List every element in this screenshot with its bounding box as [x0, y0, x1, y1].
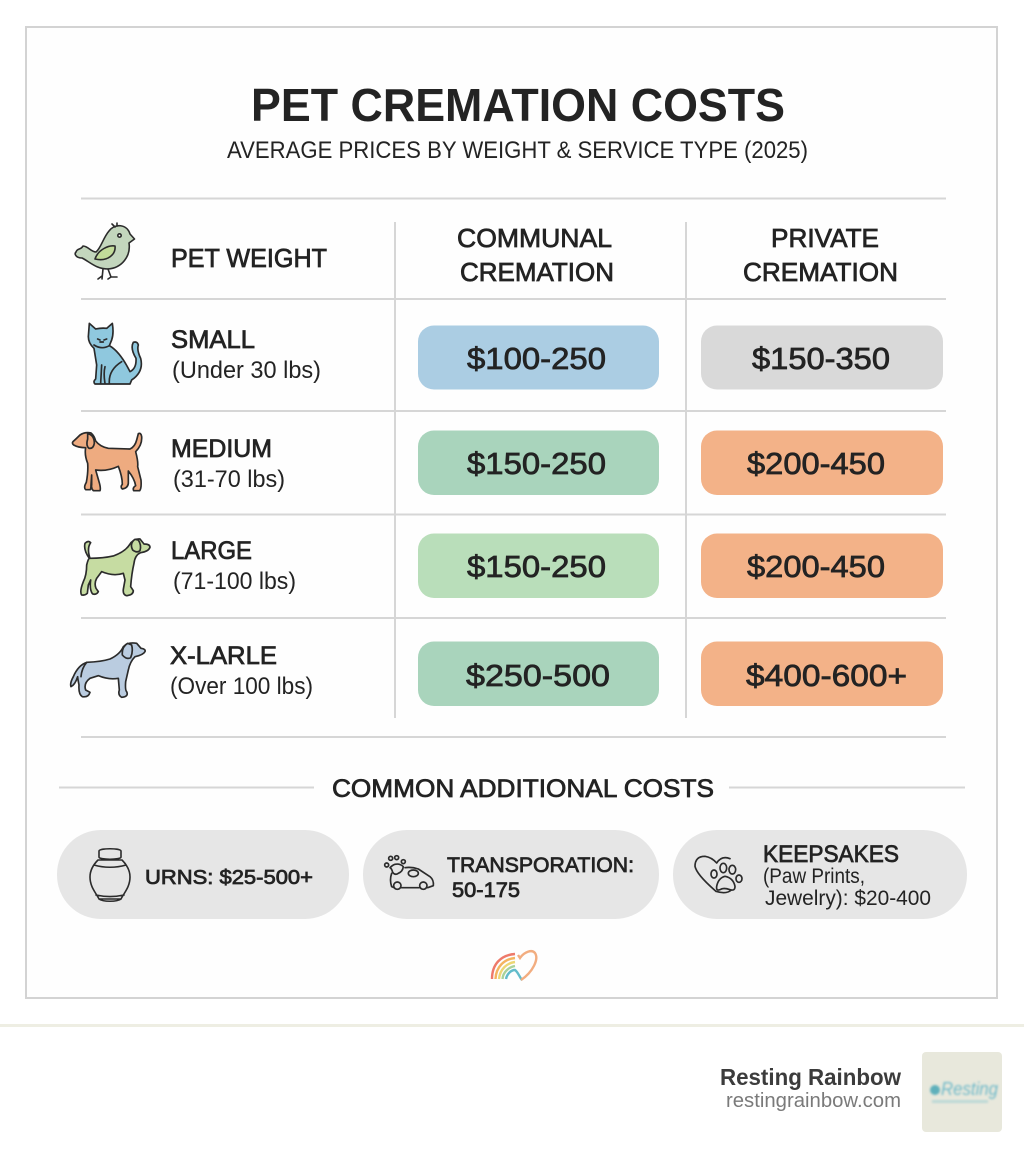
row label: large: LARGE — [171, 537, 252, 565]
subtitle: AVERAGE PRICES BY WEIGHT & SERVICE TYPE (2025) — [227, 137, 808, 164]
label: urns price: URNS: $25-500+ — [145, 867, 313, 889]
title: PET CREMATION COSTS — [251, 79, 785, 131]
price: large communal — [418, 534, 659, 598]
row label: medium: (31-70 lbs) — [173, 466, 285, 493]
label: keepsakes price: Jewelry): $20-400 — [765, 887, 931, 910]
price: x-large private — [701, 642, 943, 706]
panel: transportation — [363, 830, 659, 919]
price: large private — [701, 534, 943, 598]
row label: medium — [171, 435, 285, 493]
column heading: communal cremation: CREMATION — [460, 257, 614, 287]
panel: main card frame — [26, 27, 997, 998]
column heading: pet weight: PET WEIGHT — [171, 243, 327, 273]
footer: website: restingrainbow.com — [726, 1090, 901, 1112]
row label: small — [171, 326, 321, 384]
row label: x-large: (Over 100 lbs) — [170, 673, 313, 700]
panel: keepsakes — [673, 830, 967, 919]
price: medium communal — [418, 430, 659, 495]
price: medium private: $200-450 — [747, 446, 885, 481]
row label: small: (Under 30 lbs) — [172, 357, 321, 384]
label: keepsakes price — [763, 841, 931, 910]
row label: large: (71-100 lbs) — [173, 568, 296, 595]
price: x-large private: $400-600+ — [746, 658, 907, 693]
price: small communal: $100-250 — [467, 341, 606, 376]
panel: pricing table — [71, 223, 943, 706]
icon: cat — [88, 323, 141, 384]
column heading: private cremation — [743, 223, 898, 287]
price: large communal: $150-250 — [467, 549, 606, 584]
column heading: communal cremation: COMMUNAL — [457, 223, 612, 253]
label: keepsakes price: (Paw Prints, — [763, 865, 865, 888]
row label: large — [171, 537, 296, 595]
price: small private — [701, 326, 943, 390]
panel: urns — [57, 830, 349, 919]
price: small communal — [418, 326, 659, 390]
footer: logo thumbnail — [922, 1052, 1002, 1132]
icon: heart with paw print — [695, 856, 742, 893]
footer divider — [0, 1024, 1024, 1027]
column heading: communal cremation — [457, 223, 614, 287]
icon: medium dog — [72, 433, 142, 491]
icon: large dog — [81, 539, 150, 596]
price: x-large communal: $250-500 — [466, 658, 610, 693]
price: medium communal: $150-250 — [467, 446, 606, 481]
heading: common additional costs: COMMON ADDITIONAL COSTS — [332, 775, 714, 803]
icon: rainbow heart logo — [492, 951, 536, 980]
price: large private: $200-450 — [747, 549, 885, 584]
price: x-large communal — [418, 642, 659, 706]
price: medium private — [701, 430, 943, 495]
label: keepsakes price: KEEPSAKES — [763, 841, 899, 868]
icon: bird — [75, 223, 134, 279]
row label: small: SMALL — [171, 326, 255, 354]
label: transportation price — [447, 854, 634, 902]
column heading: private cremation: CREMATION — [743, 257, 898, 287]
row label: x-large — [170, 642, 313, 700]
footer: logo thumbnail: Resting — [941, 1079, 998, 1099]
icon: extra large dog — [71, 643, 145, 697]
icon: urn — [90, 849, 130, 901]
price: small private: $150-350 — [752, 341, 890, 376]
row label: x-large: X-LARLE — [170, 642, 277, 670]
footer: brand name: Resting Rainbow — [720, 1064, 901, 1090]
label: transportation price: 50-175 — [452, 879, 520, 902]
label: transportation price: TRANSPORATION: — [447, 854, 634, 877]
column heading: private cremation: PRIVATE — [771, 223, 879, 253]
icon: paw and car — [385, 856, 433, 889]
row label: medium: MEDIUM — [171, 435, 272, 463]
